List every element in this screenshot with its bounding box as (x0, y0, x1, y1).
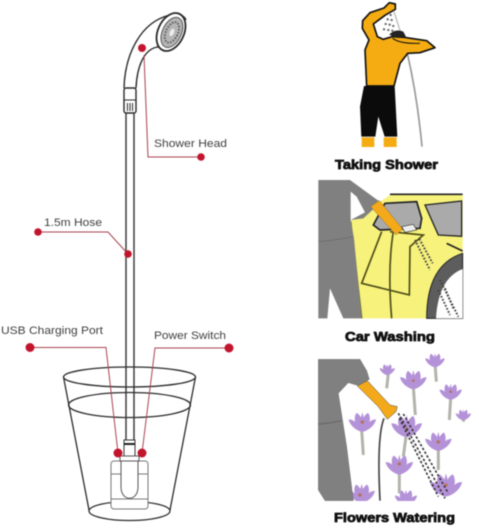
bottle (111, 440, 148, 509)
panel: taking shower (335, 3, 438, 172)
illustration: flowers watering (318, 353, 471, 514)
callout: power switch: Power Switch (154, 330, 226, 342)
caption: Flowers Watering: Flowers Watering (334, 510, 455, 525)
illustration: man showering (360, 3, 435, 147)
hose (126, 113, 134, 440)
callout: USB charging port (1, 325, 122, 458)
panel: flowers watering (318, 353, 471, 525)
callout: power switch (138, 330, 234, 458)
shower head (124, 8, 191, 113)
caption: Car Washing: Car Washing (345, 329, 435, 344)
illustration: car washing (318, 180, 463, 318)
caption: Taking Shower: Taking Shower (335, 157, 438, 172)
panel: car washing (318, 180, 463, 344)
callout: hose: 1.5m Hose (44, 217, 102, 229)
callout: hose (34, 217, 132, 258)
callout: USB charging port: USB Charging Port (1, 325, 103, 337)
cup (64, 367, 196, 520)
callout: shower head (138, 44, 227, 161)
callout: shower head: Shower Head (154, 138, 227, 150)
panel: shower diagram (1, 8, 234, 520)
